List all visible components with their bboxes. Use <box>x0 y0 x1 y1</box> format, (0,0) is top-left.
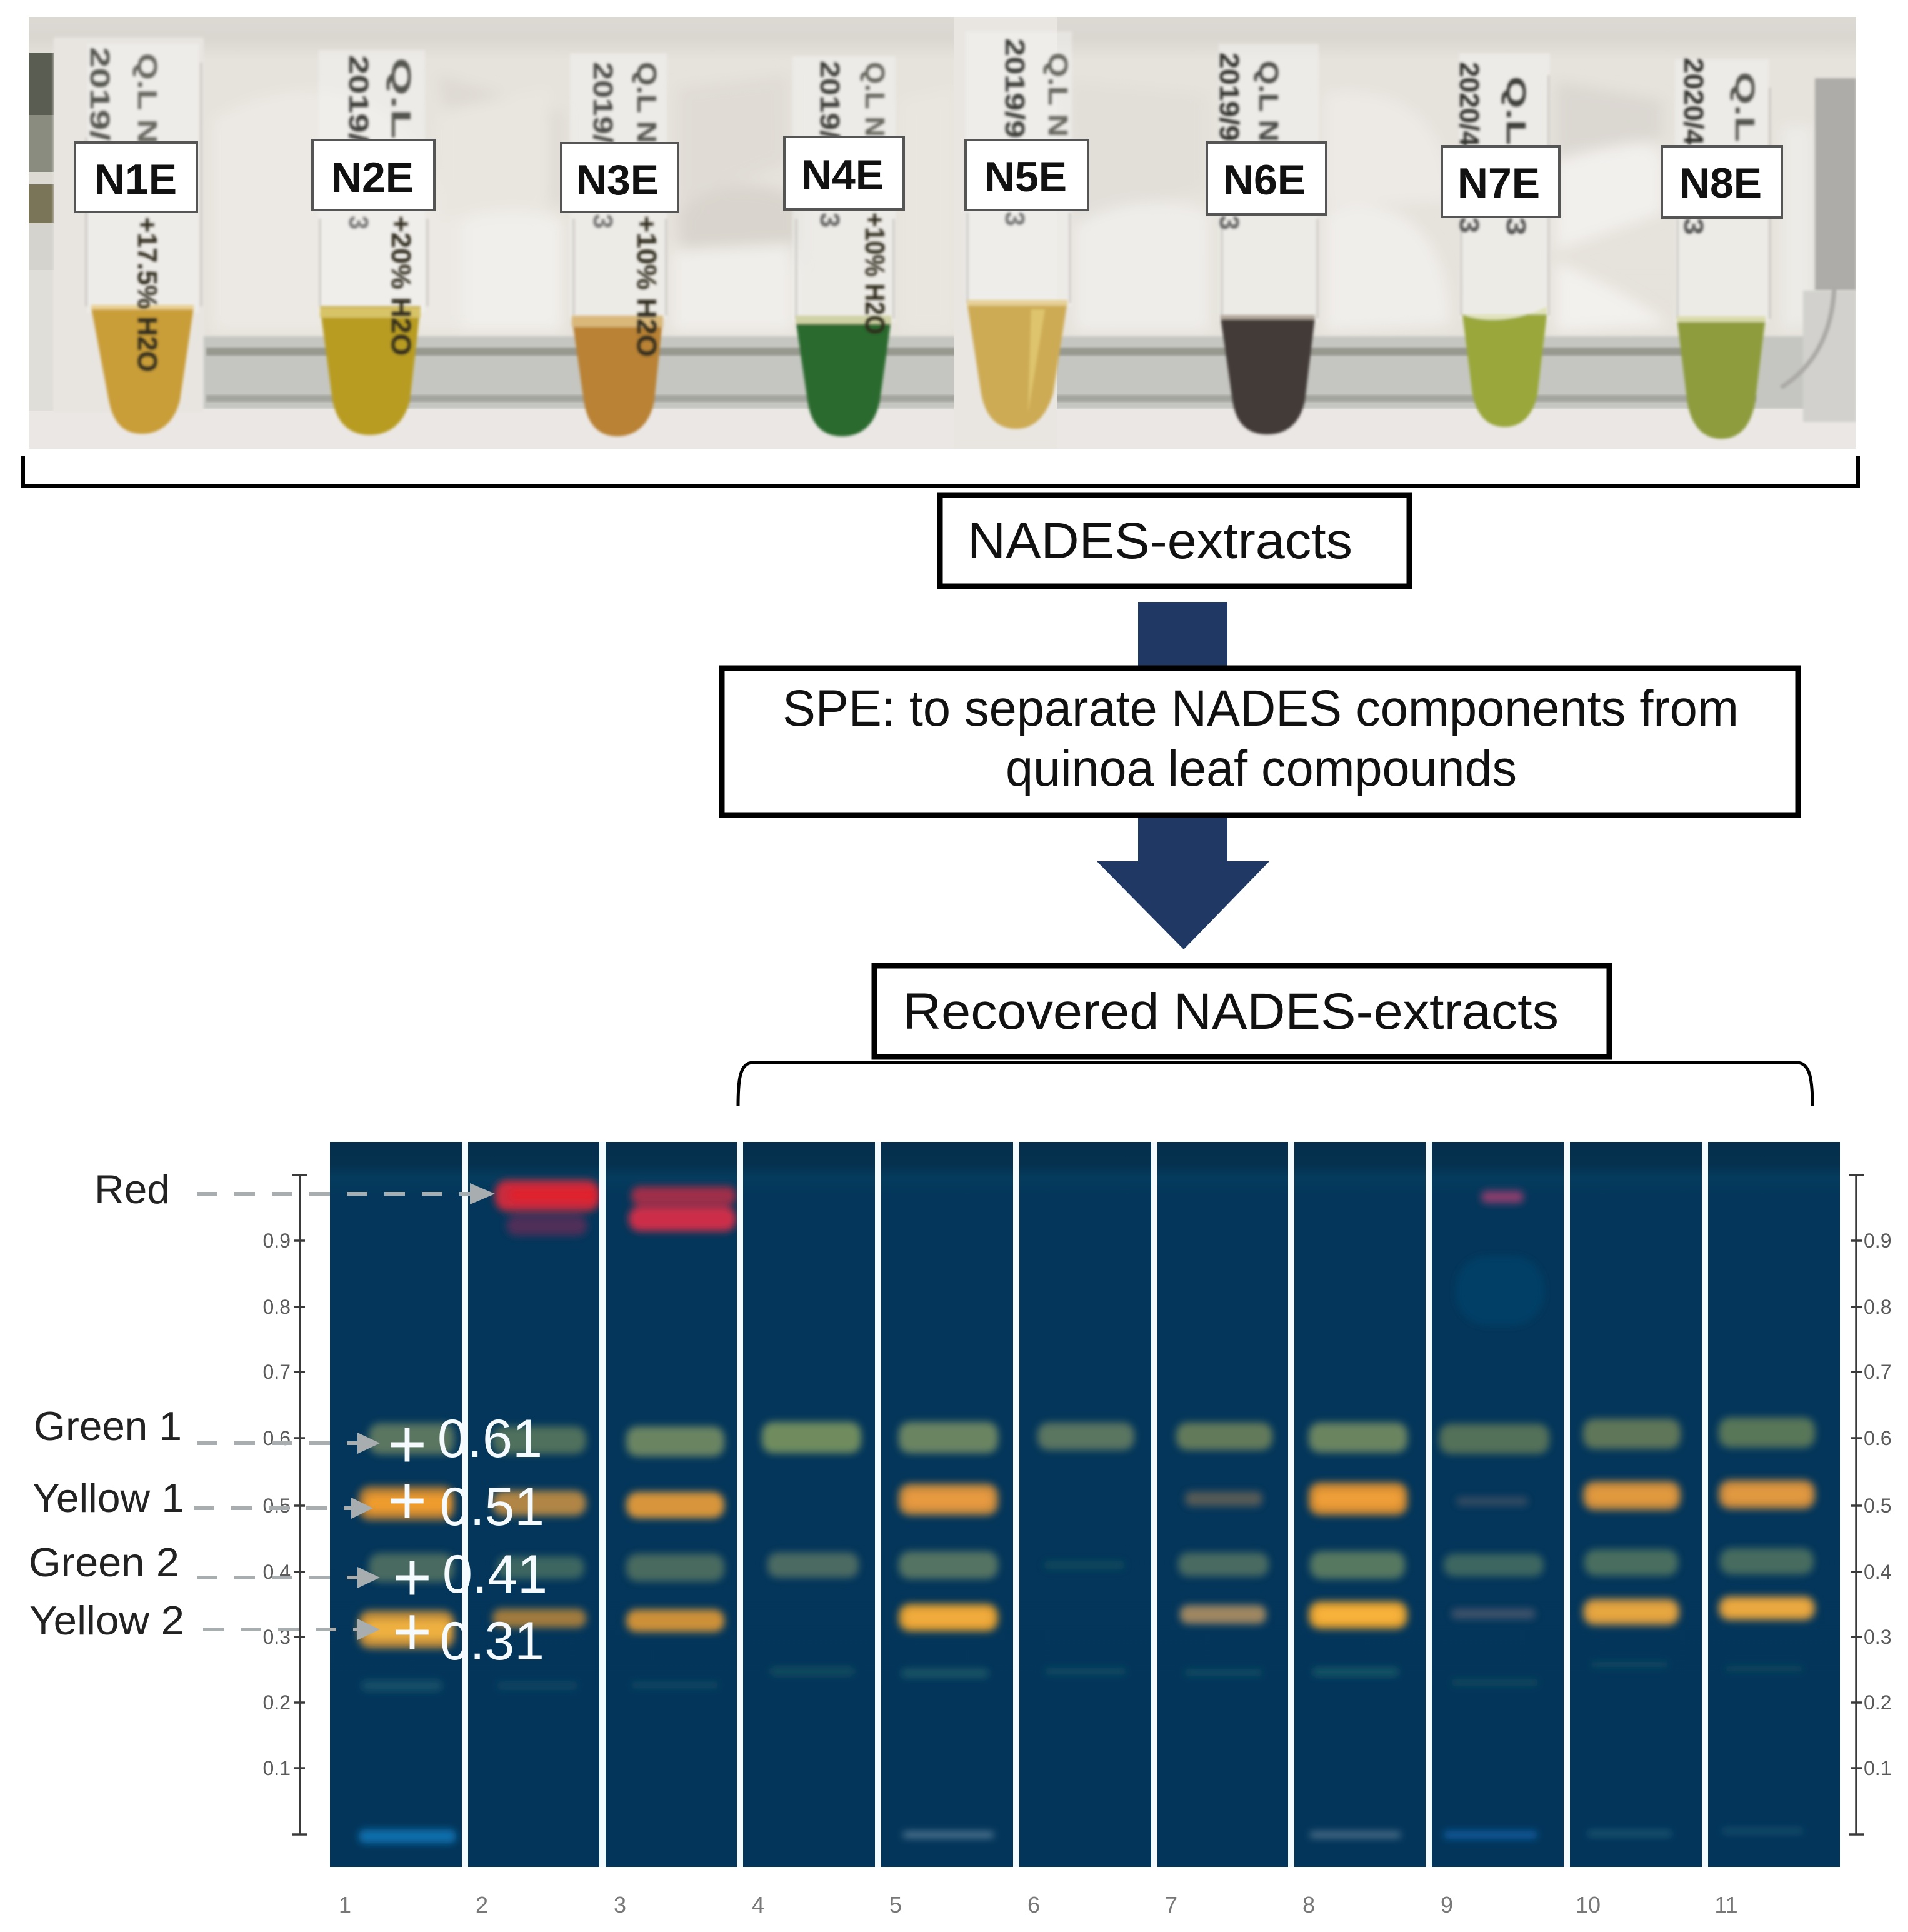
handwritten tube markings above and below labels: Q.L <box>386 58 416 139</box>
lane numbers: 11 <box>1714 1892 1738 1918</box>
lane 4 bands <box>762 1422 861 1675</box>
HPTLC plate <box>330 1142 1840 1867</box>
Rf value: 0.31 <box>392 1593 544 1671</box>
lane numbers: 10 <box>1576 1892 1601 1918</box>
bracket under photo <box>23 456 1858 486</box>
right Rf axis: 0.2 <box>1864 1691 1891 1714</box>
tube label: N5E: N5E <box>984 153 1067 201</box>
tube label: N6E: N6E <box>1223 156 1306 204</box>
left Rf axis: 0.2 <box>263 1691 291 1714</box>
handwritten tube markings above and below labels: 2019/ <box>587 62 618 143</box>
left Rf axis: 0.3 <box>263 1626 291 1648</box>
tube label: N7E <box>1442 146 1559 217</box>
handwriting below labels over tube liquid <box>132 213 890 372</box>
tube label: N5E <box>966 140 1088 210</box>
right Rf axis: 0.4 <box>1864 1561 1891 1583</box>
lane numbers: 9 <box>1441 1892 1453 1918</box>
handwriting below labels over tube liquid: +20% H2O <box>386 216 416 356</box>
box: Recovered NADES-extracts: Recovered NADES-extracts <box>903 983 1559 1040</box>
left Rf axis: 0.9 <box>263 1229 291 1252</box>
handwritten tube markings above and below labels: Q.L N <box>631 62 662 143</box>
right Rf axis: 0.3 <box>1864 1626 1891 1648</box>
right Rf axis: 0.6 <box>1864 1427 1891 1449</box>
lane separators <box>462 1142 1708 1867</box>
lane 6 bands <box>1037 1423 1134 1675</box>
tube label: N7E: N7E <box>1457 159 1540 207</box>
lane 10 bands <box>1583 1419 1681 1836</box>
box: NADES-extracts <box>940 495 1409 586</box>
Rf value: 0.41: + <box>392 1539 432 1616</box>
box: SPE step <box>722 668 1798 815</box>
handwriting below labels over tube liquid: +10% H2O <box>631 216 662 357</box>
right Rf axis: 0.8 <box>1864 1296 1891 1318</box>
handwritten tube markings above and below labels: 3 <box>1678 218 1709 235</box>
label: Red: Red <box>94 1166 170 1212</box>
left Rf axis: 0.7 <box>263 1361 291 1383</box>
lane 1 bands <box>359 1423 456 1843</box>
lane numbers: 3 <box>614 1892 626 1918</box>
brace over recovered lanes <box>738 1063 1812 1106</box>
handwritten tube markings above and below labels <box>84 38 1760 236</box>
tube label: N8E: N8E <box>1679 159 1762 207</box>
handwritten tube markings above and below labels: 2019/ <box>84 47 115 141</box>
Rf value: 0.51: + <box>387 1462 427 1539</box>
arrow: Green 1 pointer <box>197 1433 380 1454</box>
left Rf axis: 0.6 <box>263 1427 291 1449</box>
lane 8 bands <box>1309 1423 1407 1838</box>
tube label: N2E: N2E <box>331 154 414 201</box>
lane 5 bands <box>899 1422 998 1838</box>
handwritten tube markings above and below labels: 3 <box>814 213 845 228</box>
left Rf axis: 0.8 <box>263 1296 291 1318</box>
arrow: Yellow 2 pointer <box>203 1619 380 1640</box>
lane 7 bands <box>1176 1423 1272 1676</box>
handwritten tube markings above and below labels: 3 <box>999 211 1030 226</box>
right Rf axis: 0.7 <box>1864 1361 1891 1383</box>
left Rf axis <box>263 1175 307 1834</box>
handwritten tube markings above and below labels: 3 <box>343 216 374 229</box>
handwritten tube markings above and below labels: Q.L N <box>132 53 162 144</box>
tube glass bodies <box>319 31 1767 321</box>
Rf value: 0.51: 0.51 <box>440 1477 544 1537</box>
Rf value: 0.41 <box>392 1539 547 1616</box>
label: Green 1: Green 1 <box>34 1403 182 1449</box>
tube label: N1E <box>75 143 197 212</box>
right Rf axis: 0.9 <box>1864 1229 1891 1252</box>
lane 3 bands <box>626 1186 736 1689</box>
label: Green 2: Green 2 <box>29 1539 179 1585</box>
handwritten tube markings above and below labels: Q.L N <box>1042 53 1073 137</box>
label: Yellow 1: Yellow 1 <box>32 1475 184 1521</box>
box: SPE step: SPE: to separate NADES components from <box>782 680 1739 737</box>
handwritten tube markings above and below labels: 2019/ <box>343 55 374 143</box>
photo: eight NADES extract tubes <box>29 17 1856 449</box>
tube label: N8E <box>1662 146 1782 218</box>
handwritten tube markings above and below labels: 2020/4 <box>1454 62 1484 147</box>
tube label: N2E <box>312 140 434 210</box>
handwriting below labels over tube liquid: +10% H2O <box>859 213 890 334</box>
lane numbers: 8 <box>1302 1892 1315 1918</box>
right Rf axis: 0.5 <box>1864 1494 1891 1517</box>
Rf value: 0.61: 0.61 <box>437 1409 542 1469</box>
tube label: N4E <box>784 137 904 209</box>
label: Yellow 2: Yellow 2 <box>29 1598 184 1643</box>
handwritten tube markings above and below labels: 2020/4 <box>1678 58 1709 146</box>
handwritten tube markings above and below labels: Q.L <box>1501 76 1531 145</box>
handwritten tube markings above and below labels: Q.L N <box>1253 61 1284 142</box>
Rf value: 0.41: 0.41 <box>442 1544 547 1604</box>
lane numbers: 5 <box>889 1892 902 1918</box>
left Rf axis: 0.5 <box>263 1494 291 1517</box>
lane numbers: 4 <box>752 1892 764 1918</box>
lane numbers: 1 <box>339 1892 351 1918</box>
handwritten tube markings above and below labels: 3 <box>1454 217 1484 233</box>
handwritten tube markings above and below labels: 2019/9 <box>999 38 1030 138</box>
Rf value: 0.31: 0.31 <box>440 1611 544 1671</box>
handwritten tube markings above and below labels: 3 <box>587 214 618 229</box>
Rf value: 0.51 <box>387 1462 544 1539</box>
handwritten tube markings above and below labels: 2019/ <box>814 61 845 139</box>
arrow: extracts to SPE <box>1138 602 1227 671</box>
lane numbers: 2 <box>476 1892 488 1918</box>
box: Recovered NADES-extracts <box>874 966 1609 1057</box>
lane 9 bands <box>1439 1191 1549 1839</box>
tube liquids <box>91 300 1766 439</box>
lane 11 bands <box>1719 1418 1815 1833</box>
left Rf axis: 0.1 <box>263 1757 291 1779</box>
Rf value: 0.31: + <box>392 1593 432 1670</box>
box: NADES-extracts: NADES-extracts <box>967 513 1352 569</box>
tube label: N4E: N4E <box>801 151 884 199</box>
handwritten tube markings above and below labels: Q.L <box>1729 72 1760 142</box>
lane 2 bands <box>492 1180 600 1690</box>
handwritten tube markings above and below labels: 3 <box>1501 217 1531 236</box>
arrow: Yellow 1 pointer <box>194 1498 373 1519</box>
tube label: N3E: N3E <box>576 156 659 204</box>
Rf value: 0.61 <box>387 1406 542 1483</box>
handwritten tube markings above and below labels: Q.L N <box>859 62 890 137</box>
handwritten tube markings above and below labels: 2019/9 <box>1214 53 1244 141</box>
tube label: N1E: N1E <box>94 156 177 203</box>
handwriting below labels over tube liquid: +17.5% H2O <box>132 217 162 372</box>
arrow: Red pointer <box>197 1183 495 1204</box>
tube label: N3E <box>561 143 678 212</box>
left Rf axis: 0.4 <box>263 1561 291 1583</box>
lane numbers: 6 <box>1027 1892 1040 1918</box>
box: SPE step: quinoa leaf compounds <box>1006 740 1517 797</box>
tube label: N6E <box>1207 143 1326 214</box>
lane numbers <box>339 1892 1738 1918</box>
right Rf axis: 0.1 <box>1864 1757 1891 1779</box>
handwritten tube markings above and below labels: 3 <box>1214 215 1244 230</box>
arrow: SPE to recovered extracts <box>1097 814 1269 949</box>
lane numbers: 7 <box>1165 1892 1177 1918</box>
Rf value: 0.61: + <box>387 1406 427 1483</box>
right Rf axis <box>1849 1175 1891 1834</box>
arrow: Green 2 pointer <box>197 1567 380 1588</box>
